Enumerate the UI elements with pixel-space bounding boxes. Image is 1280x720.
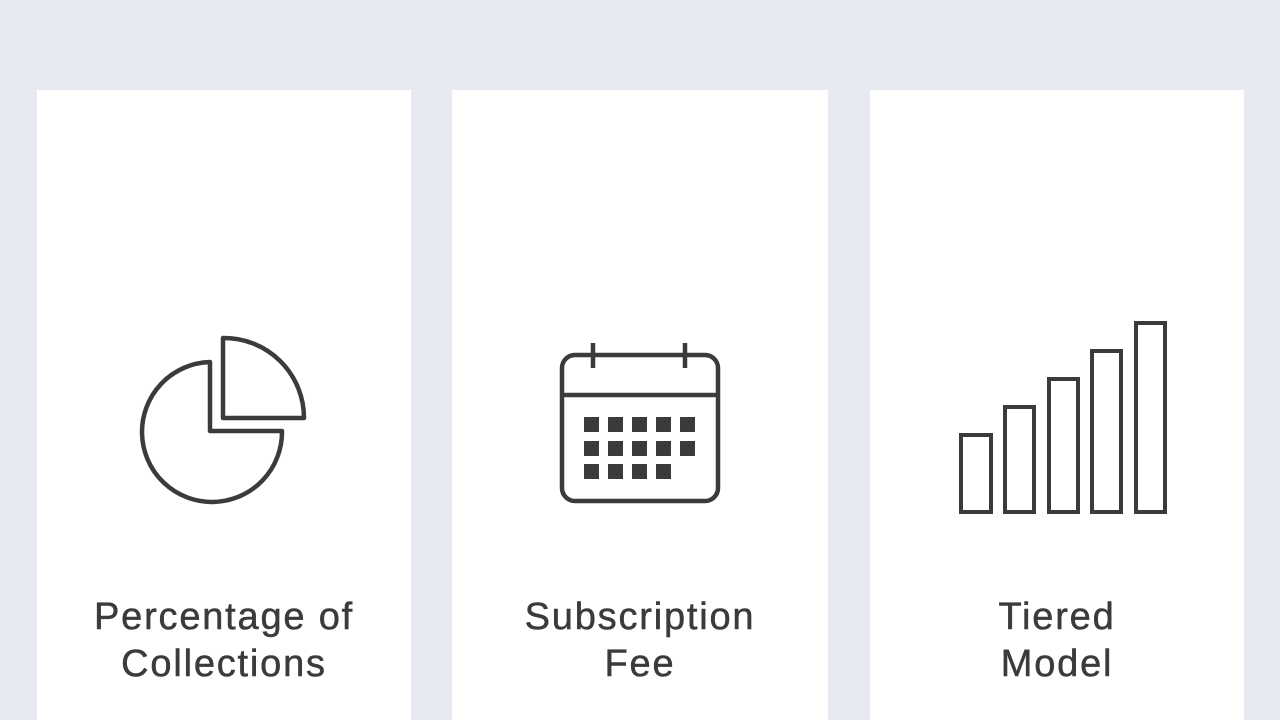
- icon: calendar: [560, 343, 720, 504]
- label: Model: [1001, 643, 1113, 685]
- icon: pie chart: [140, 336, 306, 504]
- icon: bar chart: [959, 321, 1167, 514]
- label: Percentage of: [94, 596, 354, 638]
- panel: percentage of collections: [37, 90, 411, 720]
- label: [94, 596, 354, 685]
- label: [998, 596, 1116, 685]
- panel: subscription fee: [452, 90, 828, 720]
- label: Tiered: [998, 596, 1116, 638]
- panel: tiered model: [870, 90, 1244, 720]
- label: Subscription: [525, 596, 755, 638]
- label: [525, 596, 755, 685]
- label: Fee: [605, 643, 675, 685]
- label: Collections: [121, 643, 327, 685]
